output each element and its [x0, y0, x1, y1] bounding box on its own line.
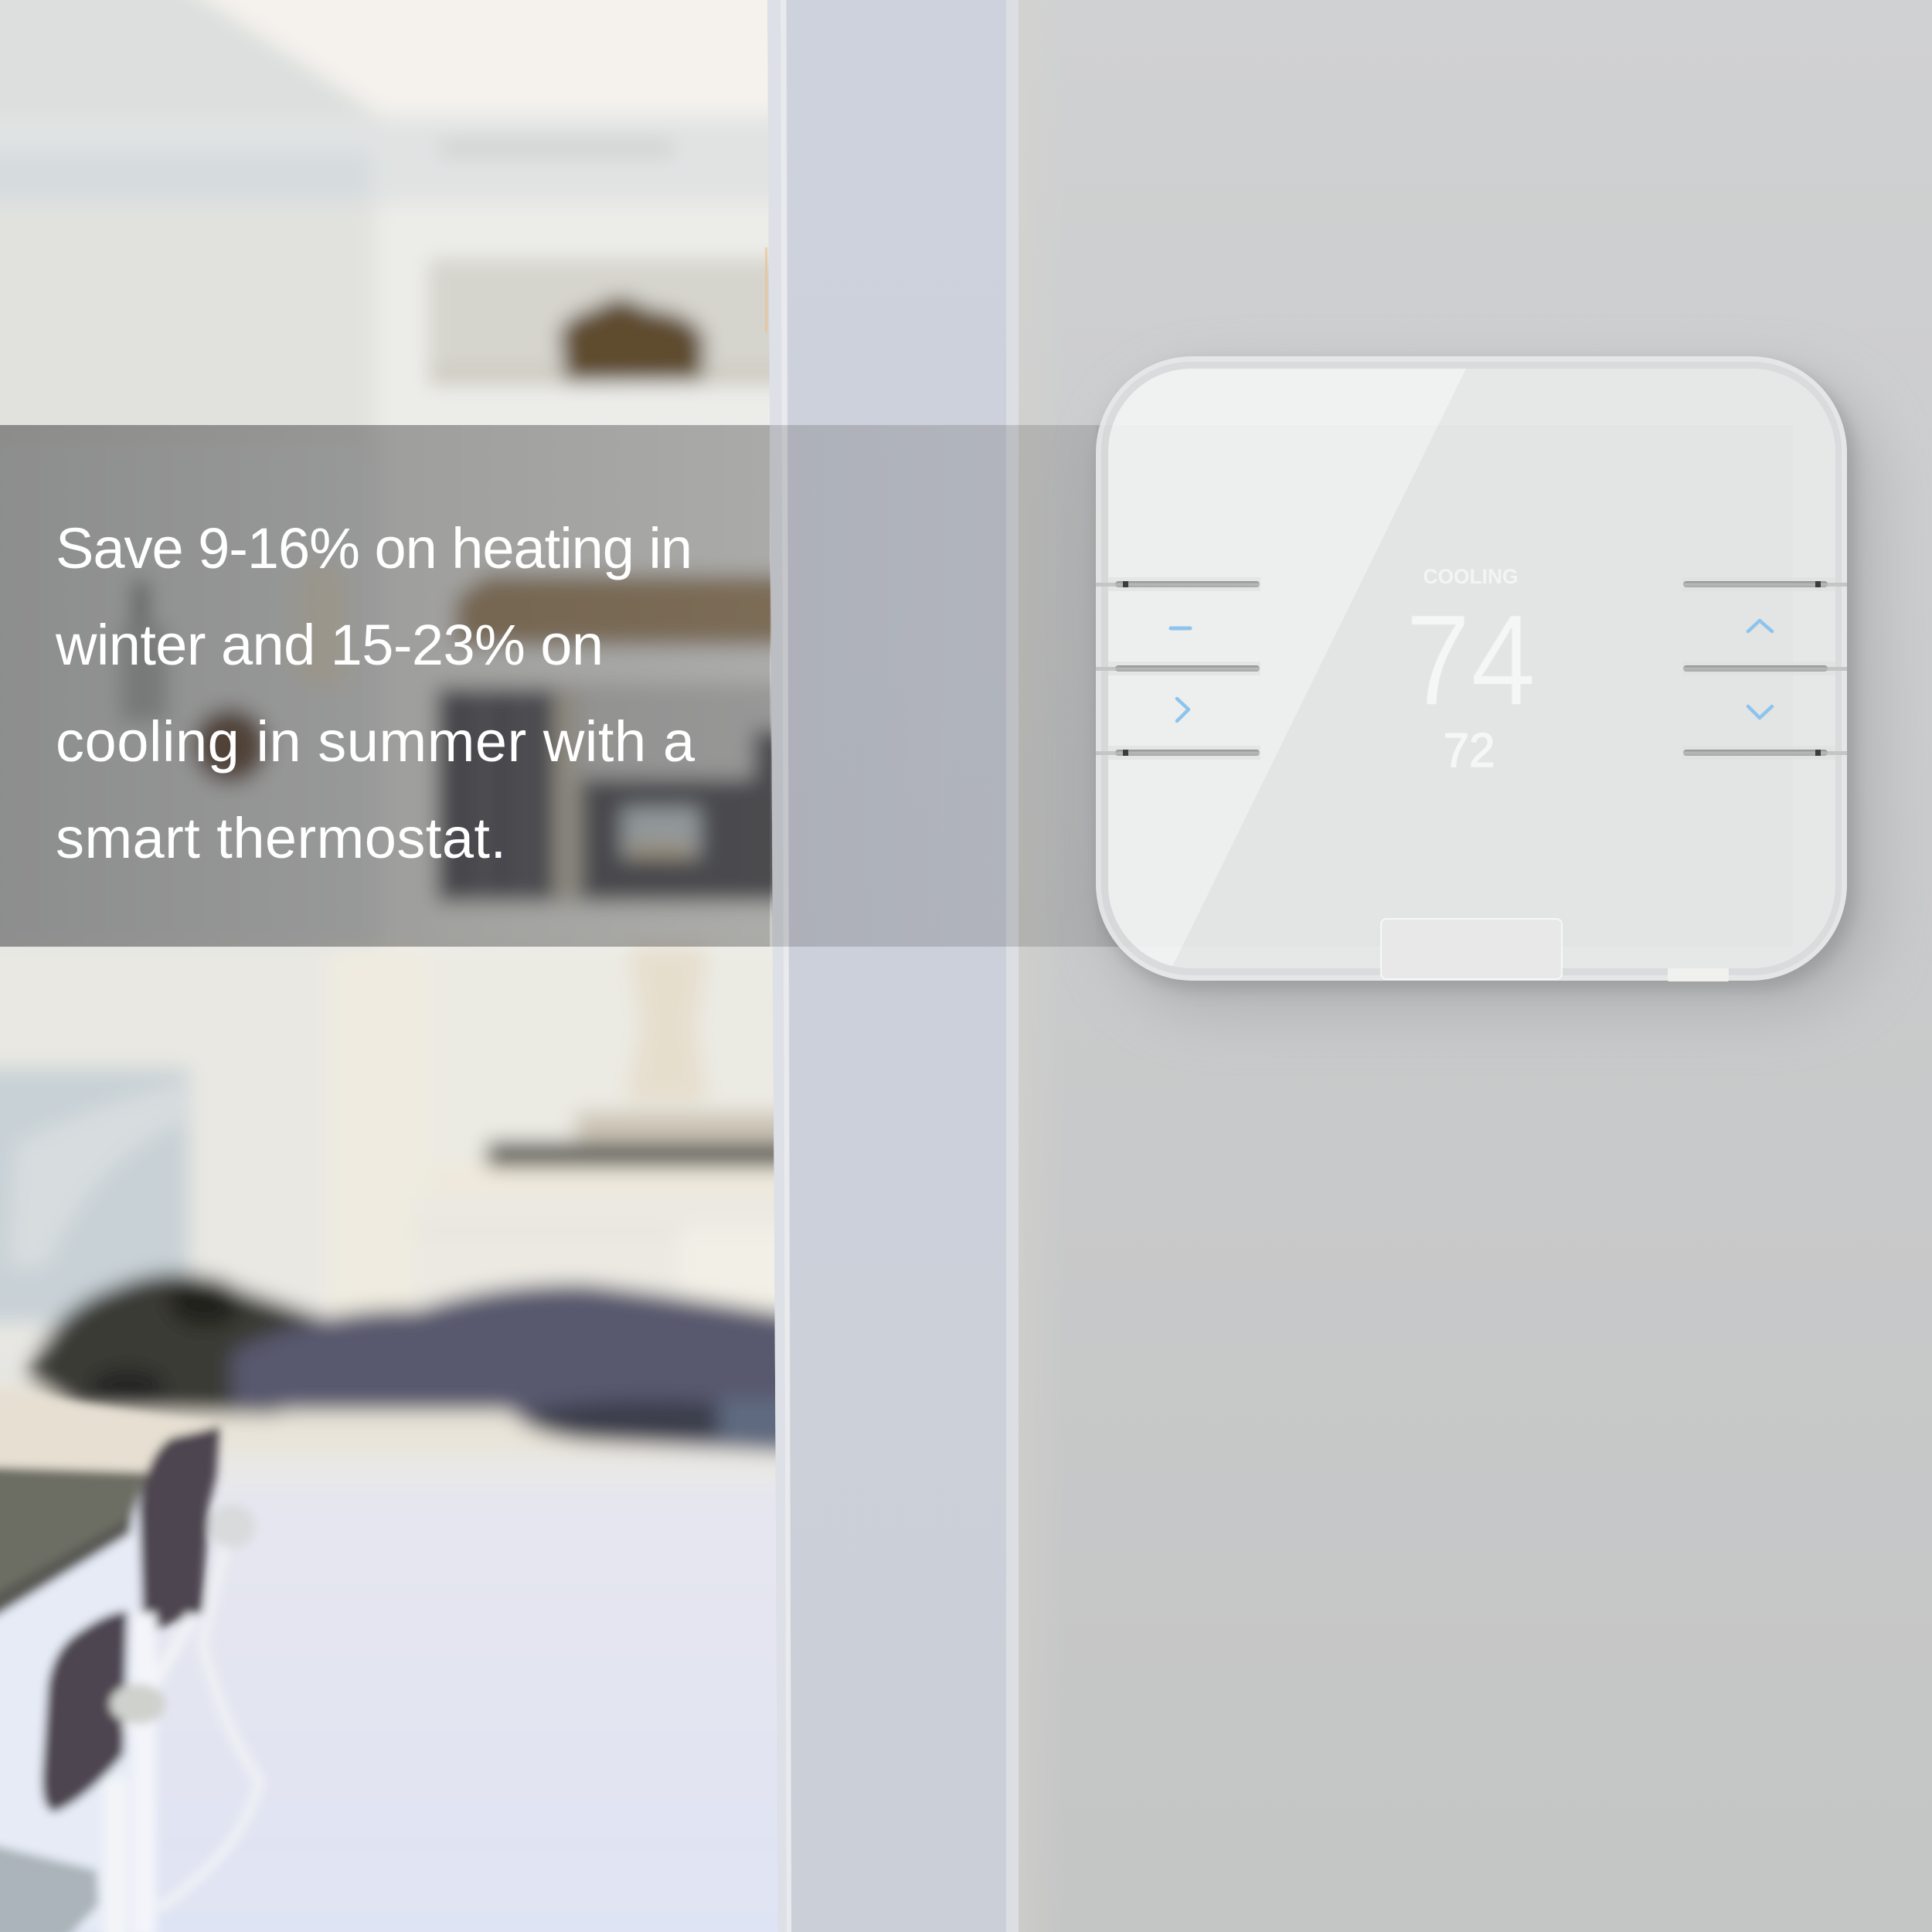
- icon: minus: [1171, 626, 1190, 631]
- banner text: winter and 15-23% on: [55, 613, 604, 677]
- inner housing ring: [1101, 362, 1842, 975]
- lower recess: [437, 684, 800, 904]
- warm highlight on frame edge: [765, 247, 767, 332]
- right slots: [1682, 577, 1847, 760]
- table side: [0, 1467, 147, 1615]
- left white cabinet: [0, 1468, 155, 1932]
- display face: [1108, 369, 1835, 968]
- background: blurred bedroom: [0, 0, 808, 1932]
- chair back lower: [43, 1611, 128, 1812]
- thermostat shadow on wall: [1101, 365, 1874, 1009]
- bed cover: [0, 1383, 804, 1476]
- thermostat: [1096, 356, 1847, 981]
- lower-left seat: [0, 1843, 98, 1932]
- shelf unit: [379, 202, 804, 975]
- set temperature: 72: [1444, 724, 1495, 777]
- banner text: smart thermostat.: [56, 806, 506, 870]
- framed picture: [581, 779, 805, 900]
- wall art: [0, 1068, 189, 1323]
- middle shelf item: [456, 576, 804, 645]
- wall: [1019, 0, 1932, 1932]
- vase: [303, 573, 340, 679]
- round brown object: [193, 709, 267, 783]
- chair back upper: [139, 1426, 219, 1634]
- left slots: [1096, 577, 1260, 760]
- lower shelf: [429, 947, 800, 1179]
- banner text: cooling in summer with a: [56, 709, 696, 774]
- lower wall: [0, 947, 332, 1349]
- chair joints: [110, 1684, 165, 1724]
- books: [437, 689, 553, 900]
- drawers: [413, 1190, 800, 1306]
- table top: [0, 1387, 220, 1484]
- bottom tab: [1381, 919, 1562, 979]
- purple blanket: [232, 1284, 804, 1453]
- banner text: Save 9-16% on heating in: [56, 516, 692, 580]
- translucent banner: [0, 425, 1159, 947]
- outer housing: [1096, 356, 1847, 981]
- sloped ceiling shadow: [0, 0, 369, 121]
- left wall within banner: [187, 702, 274, 790]
- basket: [560, 298, 705, 382]
- banner text: [55, 516, 696, 870]
- chair frame: [158, 1522, 259, 1909]
- soffit band: [359, 122, 673, 127]
- bottle: [133, 581, 148, 631]
- icon: chevron right: [1177, 699, 1189, 721]
- current temperature: 74: [1405, 587, 1536, 733]
- mode label: COOLING: [1423, 565, 1518, 588]
- bottom latch: [1668, 968, 1729, 981]
- ceiling: [206, 0, 768, 116]
- left wall: [1117, 945, 1825, 946]
- glass sheen: [1097, 369, 1466, 968]
- icon: chevron up: [1748, 621, 1772, 631]
- dark green cushion: [27, 1274, 325, 1414]
- face banner tint: [1096, 425, 1793, 947]
- door frame post: [765, 0, 1019, 1932]
- bed front: [0, 1453, 804, 1932]
- upper shelf recess: [429, 259, 800, 383]
- lamp: [626, 947, 707, 1101]
- icon: chevron down: [1748, 706, 1772, 718]
- chair legs: [104, 1777, 128, 1932]
- cream column: [328, 947, 433, 1349]
